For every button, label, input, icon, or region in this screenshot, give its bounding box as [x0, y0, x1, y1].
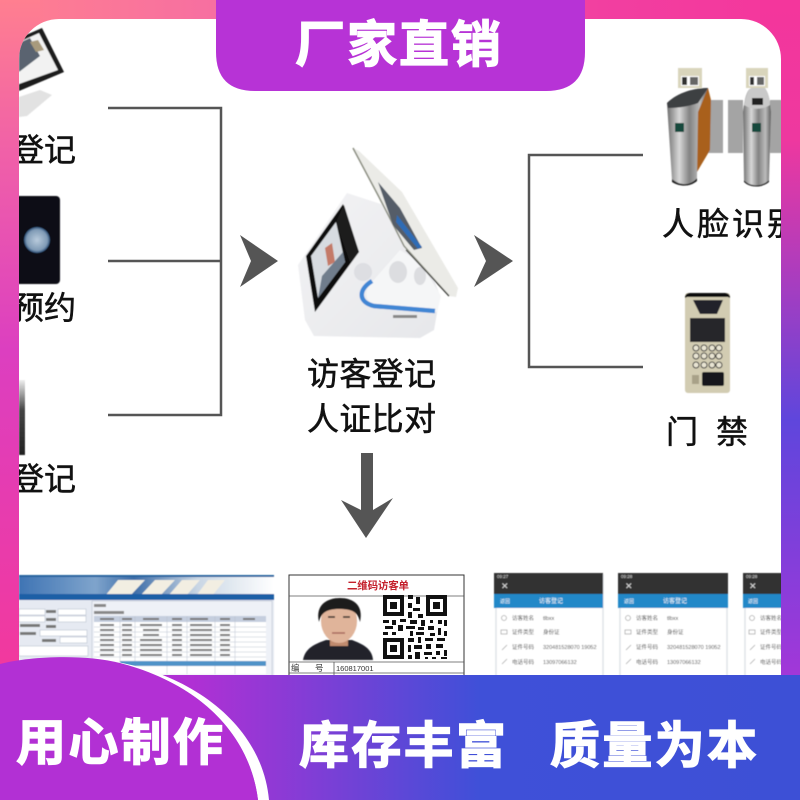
phone screen 1: 电话号码 [512, 658, 535, 666]
phone screen 2: 09:28 [621, 574, 633, 579]
icon: access control panel [685, 293, 730, 393]
phone screen 2: 13097066132 [667, 660, 701, 666]
purple corner shape [0, 657, 258, 800]
icon: face recognition gates [667, 68, 784, 186]
phone screen 1: 13097066132 [543, 660, 577, 666]
label: visitor registration: 访客登记 [307, 356, 436, 392]
phone screen 2: 电话号码 [636, 658, 659, 666]
label: door access [668, 416, 747, 446]
phone screen 1: 证件号码 [512, 643, 535, 651]
QR code [383, 595, 447, 659]
gradient frame: top edge [0, 0, 800, 40]
slip number row [291, 664, 374, 672]
gradient frame: left edge [0, 0, 40, 700]
icon: dual-screen visitor kiosk [298, 148, 458, 338]
slip number row: 160817001 [336, 664, 374, 673]
phone screen 3: 证件号码 [760, 643, 783, 651]
phone screen 2: 证件号码 [636, 643, 659, 651]
heading text: 厂家直销 [295, 17, 501, 73]
icon: smartphone with moon [19, 195, 61, 285]
phone screen 1 [494, 573, 603, 680]
phone screen 1: 09:27 [497, 574, 509, 579]
arrow: to gates [474, 235, 513, 287]
phone screen 1: tlbxx [543, 616, 555, 622]
phone screen 3: 电话号码 [760, 658, 783, 666]
label: door access: 禁 [716, 414, 748, 450]
phone screen 1: 访客登记 [539, 597, 563, 605]
slip number row: 编 [291, 663, 300, 673]
phone screen 2: 访客姓名 [636, 614, 658, 622]
phone screen 2: 访客登记 [663, 597, 687, 605]
arrow: to kiosk [240, 235, 278, 287]
bottom band [0, 675, 800, 800]
label: ID comparison: 人证比对 [307, 401, 436, 437]
slip title: 二维码访客单 [347, 579, 410, 592]
phone screen 2: tlbxx [667, 616, 679, 622]
connector: left bracket [108, 108, 221, 415]
phone screen 2: 身份证 [667, 628, 684, 636]
slogan: abundant stock: 库存丰富 [299, 718, 506, 774]
phone screen 1: 证件类型 [512, 628, 535, 636]
phone screen 1: 返回 [500, 598, 510, 605]
phone screen 3: 证件类型 [760, 628, 783, 636]
label: appointment: 预约 [12, 290, 76, 326]
icon: desktop registration terminal [19, 28, 64, 117]
icon: dark kiosk fragment [19, 380, 25, 455]
phone screen 2: 证件类型 [636, 628, 659, 636]
phone screen 3: 09:28 [746, 574, 758, 579]
label: face recognition: 人脸识别 [662, 206, 799, 242]
slip number row: 号 [315, 663, 324, 673]
phone screen 1: ✕ [501, 581, 509, 591]
phone screen 1: 访客姓名 [512, 614, 534, 622]
label: door access: 门 [666, 414, 698, 450]
phone screen 2: ✕ [625, 581, 633, 591]
screenshot: management software [19, 575, 274, 681]
arrow: down to outputs [341, 453, 393, 538]
slogan: quality first: 质量为本 [550, 718, 757, 774]
visitor QR slip [289, 575, 464, 685]
phone screen 1: 320481528070 19052 [543, 645, 597, 651]
phone screen 3: 返回 [748, 598, 758, 605]
label: registration bottom: 登记 [12, 461, 76, 497]
phone screen 1: 身份证 [543, 628, 560, 636]
label: registration top: 登记 [12, 132, 76, 168]
white arc [88, 658, 269, 800]
gradient frame: right edge [760, 0, 800, 700]
connector: right bracket [529, 155, 643, 367]
visitor portrait [303, 598, 373, 660]
slogan: made with care: 用心制作 [16, 715, 223, 771]
phone screen 3 [742, 572, 781, 675]
phone screen 3: 访客姓名 [760, 614, 782, 622]
phone screen 3: ✕ [749, 581, 757, 591]
heading tab [216, 0, 585, 91]
phone screen 2: 320481528070 19052 [667, 645, 721, 651]
phone screen 2 [618, 573, 728, 680]
phone screen 2: 返回 [624, 598, 634, 605]
